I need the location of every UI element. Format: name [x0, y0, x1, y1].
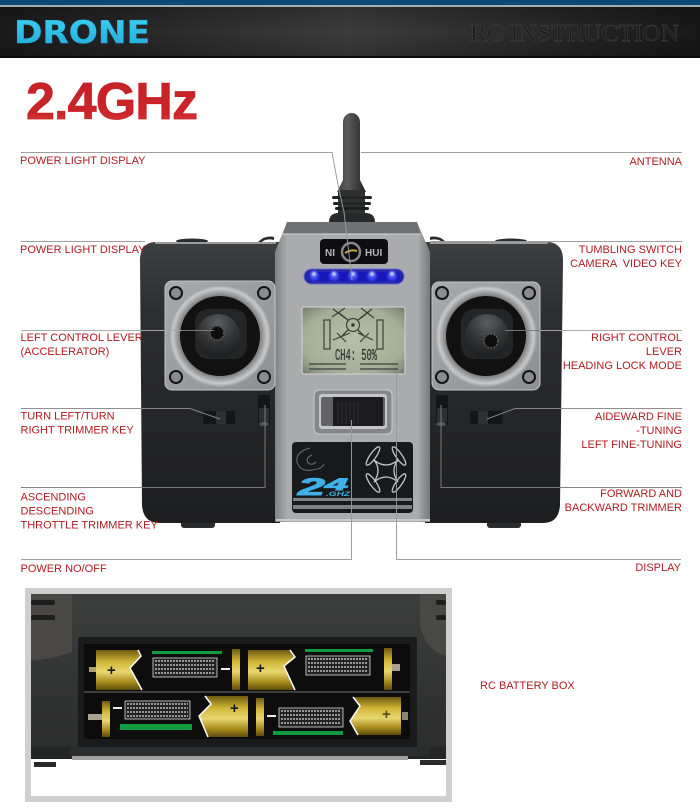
- battery 3: +: [230, 700, 239, 717]
- trimmer keys: [203, 395, 502, 426]
- header subtitle: RC INSTRUCTION: RC INSTRUCTION: [470, 21, 679, 47]
- label: tumbling switch, camera video key: TUMBLING SWITCH: [579, 244, 682, 256]
- LCD display: [302, 307, 405, 374]
- 2.4 GHz logo: .GHZ: [326, 492, 351, 498]
- 2.4 GHz logo: [296, 474, 351, 501]
- label: power light display (top): POWER LIGHT DISPLAY: [20, 155, 146, 167]
- small top knobs and feet: [176, 237, 527, 528]
- label: antenna: ANTENNA: [629, 156, 683, 168]
- label: throttle trimmer key: ASCENDING: [20, 492, 86, 504]
- right grip body: [425, 242, 563, 523]
- label: left control lever: LEFT CONTROL LEVER: [20, 332, 143, 344]
- antenna: [329, 113, 375, 222]
- label: turn left/right trimmer key: RIGHT TRIMMER KEY: [20, 424, 134, 436]
- header banner: [0, 0, 700, 58]
- battery 2: [248, 648, 400, 690]
- label: forward and backward trimmer: FORWARD AND: [600, 488, 682, 500]
- battery 1: [89, 649, 241, 690]
- label: power on/off: POWER NO/OFF: [20, 563, 107, 575]
- label: tumbling switch, camera video key: CAMERA VIDEO KEY: [570, 258, 683, 270]
- battery 2: +: [256, 660, 265, 677]
- frequency heading: 2.4GHz: 2.4GHz: [26, 73, 198, 131]
- label: aileron fine tuning: AIDEWARD FINE: [595, 411, 682, 423]
- battery compartment: [78, 637, 417, 747]
- quadcopter icon: [364, 445, 408, 494]
- label: right control lever: LEVER: [646, 346, 682, 358]
- label: throttle trimmer key: DESCENDING: [20, 506, 94, 518]
- right control stick: [432, 282, 540, 390]
- label: left control lever: (ACCELERATOR): [20, 346, 109, 358]
- battery 4: [255, 696, 408, 737]
- label: display: DISPLAY: [635, 562, 682, 574]
- callout leader lines: [21, 152, 682, 560]
- battery 4: +: [382, 706, 391, 723]
- controller underside: [31, 594, 446, 756]
- power slide switch: [314, 390, 392, 434]
- label: power light display (second): POWER LIGHT DISPLAY: [20, 244, 146, 256]
- label: aileron fine tuning: LEFT FINE-TUNING: [581, 439, 682, 451]
- 2.4 GHz logo: 2: [296, 474, 326, 501]
- swirl logo: [297, 448, 324, 470]
- label: right control lever: RIGHT CONTROL: [591, 332, 682, 344]
- header title: DRONE: DRONE: [14, 15, 150, 51]
- battery 3: [88, 696, 248, 737]
- brand badge: HUI: [365, 248, 382, 259]
- label: throttle trimmer key: THROTTLE TRIMMER KEY: [20, 520, 158, 532]
- label: aileron fine tuning: -TUNING: [636, 425, 682, 437]
- blue LED bar: [304, 269, 404, 284]
- center silver panel: [275, 222, 430, 522]
- left grip body: [140, 242, 280, 523]
- left control stick: [165, 281, 275, 390]
- brand badge: NI: [325, 248, 335, 259]
- label: turn left/right trimmer key: TURN LEFT/TURN: [20, 410, 115, 422]
- transmitter photo illustration: [140, 113, 563, 528]
- battery 1: +: [107, 662, 116, 679]
- battery box photo: [28, 591, 449, 799]
- LCD readout: CH4: 50%: [335, 347, 377, 366]
- logo plate: [292, 442, 413, 513]
- 2.4 GHz logo: 4: [323, 475, 349, 494]
- label: RC battery box: RC BATTERY BOX: [480, 680, 575, 692]
- label: forward and backward trimmer: BACKWARD TRIMMER: [565, 502, 682, 514]
- brand badge: [320, 239, 388, 264]
- label: right control lever: HEADING LOCK MODE: [563, 360, 682, 372]
